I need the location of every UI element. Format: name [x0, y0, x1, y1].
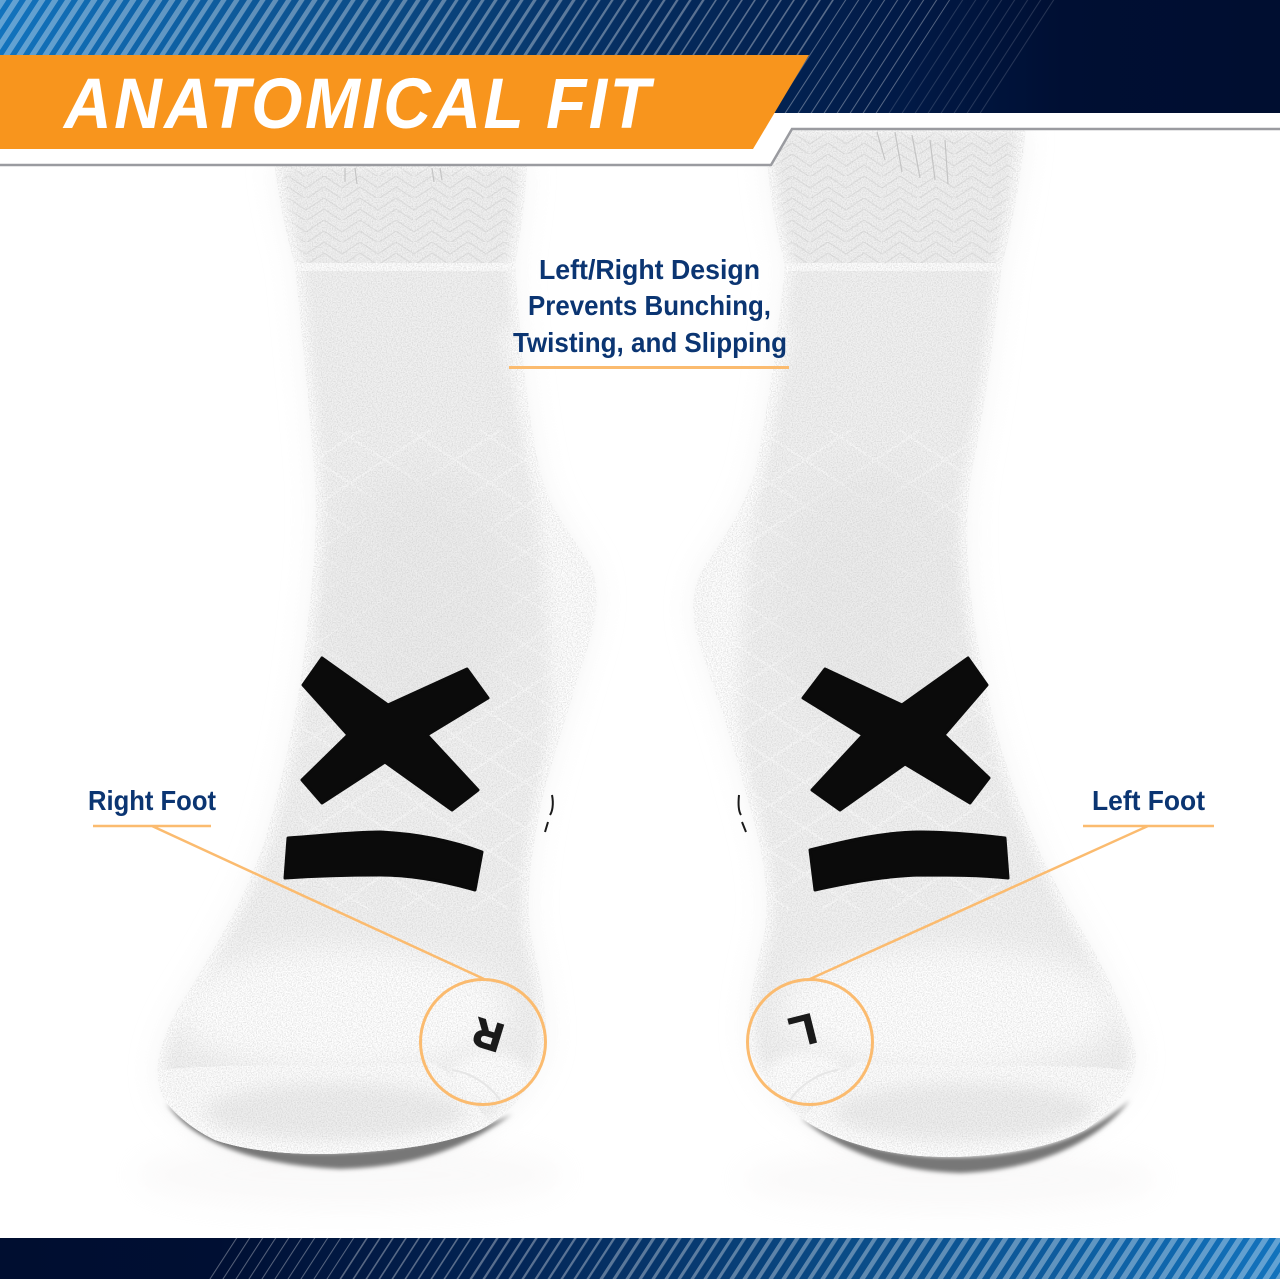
callout text line 3: Twisting, and Slipping — [513, 327, 787, 358]
highlight circle — [748, 980, 872, 1104]
highlight circle — [420, 980, 546, 1104]
cuff stitching — [345, 168, 442, 184]
sock body — [158, 160, 597, 1154]
toe shadow — [800, 1100, 1130, 1173]
black bar mark — [285, 832, 482, 890]
toe crease — [790, 1070, 838, 1100]
black bar mark — [810, 832, 1008, 890]
cuff stitching — [877, 132, 948, 184]
fabric shading — [680, 120, 1150, 1170]
callout underline — [509, 366, 789, 369]
side marks — [739, 795, 746, 832]
black X mark — [302, 658, 488, 810]
soft halo — [158, 160, 597, 1154]
stitched L: L — [785, 1005, 821, 1056]
label: Left Foot — [1092, 785, 1205, 816]
fabric shading — [150, 160, 610, 1170]
floor glow — [135, 1140, 565, 1210]
soft halo — [693, 125, 1136, 1157]
sock: right foot — [158, 166, 597, 1174]
stitched R: R — [468, 1009, 509, 1059]
title: ANATOMICAL FIT — [62, 64, 655, 144]
leader line — [810, 826, 1214, 979]
leader line — [93, 826, 484, 979]
black X mark — [803, 658, 989, 810]
diagonal stripes — [209, 1238, 1280, 1279]
callout text line 1: Left/Right Design — [539, 254, 760, 285]
orange title banner — [0, 55, 809, 149]
label: Right Foot — [88, 785, 216, 816]
toe shadow — [166, 1103, 512, 1169]
footer band — [0, 1238, 1280, 1279]
gradient background — [0, 1238, 1280, 1279]
sock body — [693, 125, 1136, 1157]
toe crease — [452, 1070, 500, 1100]
header band — [0, 0, 1280, 165]
callout text line 2: Prevents Bunching, — [528, 290, 771, 321]
gradient background — [0, 0, 1280, 113]
floor glow — [740, 1148, 1160, 1212]
side marks — [545, 795, 553, 832]
callout: left foot — [748, 785, 1214, 1104]
white ribbon with grey edge — [0, 113, 1280, 165]
callout: right foot — [88, 785, 546, 1104]
sock: left foot — [693, 125, 1136, 1178]
callout: left/right design — [509, 254, 789, 369]
diagonal stripes — [0, 0, 1056, 113]
